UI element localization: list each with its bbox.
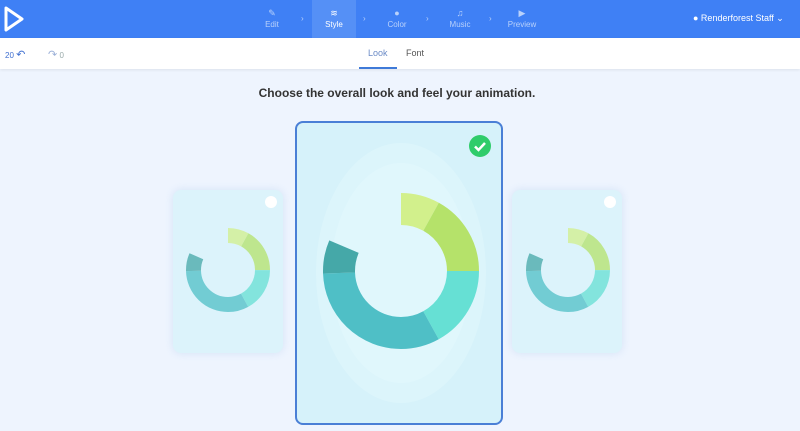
tab: Look: Look xyxy=(368,48,388,58)
undo counter: 20 ↶ xyxy=(5,49,25,61)
background ellipses xyxy=(334,163,466,383)
nav item: Style active xyxy=(312,0,356,38)
nav item: Edit: Edit xyxy=(265,20,279,29)
radio dot xyxy=(604,196,616,208)
nav item: Preview xyxy=(508,8,536,29)
nav item: Music xyxy=(450,8,470,29)
nav item: Edit xyxy=(265,8,279,29)
donut main xyxy=(323,193,479,349)
nav item: Music: Music xyxy=(450,20,470,29)
donut small xyxy=(186,228,270,312)
check icon xyxy=(469,135,491,157)
logo xyxy=(4,6,24,32)
tab: Font: Font xyxy=(406,48,424,58)
nav item: Music: ♫ xyxy=(457,8,463,18)
nav item: Color: Color xyxy=(387,20,407,29)
top navigation bar: › xyxy=(301,14,304,23)
top navigation bar: › xyxy=(426,14,429,23)
heading: Choose the overall look and feel your animation. xyxy=(259,86,535,100)
nav item: Color xyxy=(387,8,407,29)
sub toolbar xyxy=(0,38,800,69)
card left xyxy=(173,190,283,353)
card right xyxy=(512,190,622,353)
top navigation bar: › xyxy=(363,14,366,23)
user menu: ● Renderforest Staff ⌄ xyxy=(693,13,784,23)
nav item: Preview: ▶ xyxy=(519,8,525,18)
nav item: Preview: Preview xyxy=(508,20,536,29)
donut small xyxy=(526,228,610,312)
nav item: Style active: Style xyxy=(325,20,343,29)
card main selected xyxy=(295,121,503,425)
nav item: Edit: ✎ xyxy=(268,8,276,18)
top navigation bar xyxy=(0,0,800,38)
nav item: Style active: ≋ xyxy=(330,8,338,18)
radio dot xyxy=(265,196,277,208)
redo counter: ↷ 0 xyxy=(48,49,64,61)
nav item: Color: ● xyxy=(394,8,400,18)
top navigation bar: › xyxy=(489,14,492,23)
